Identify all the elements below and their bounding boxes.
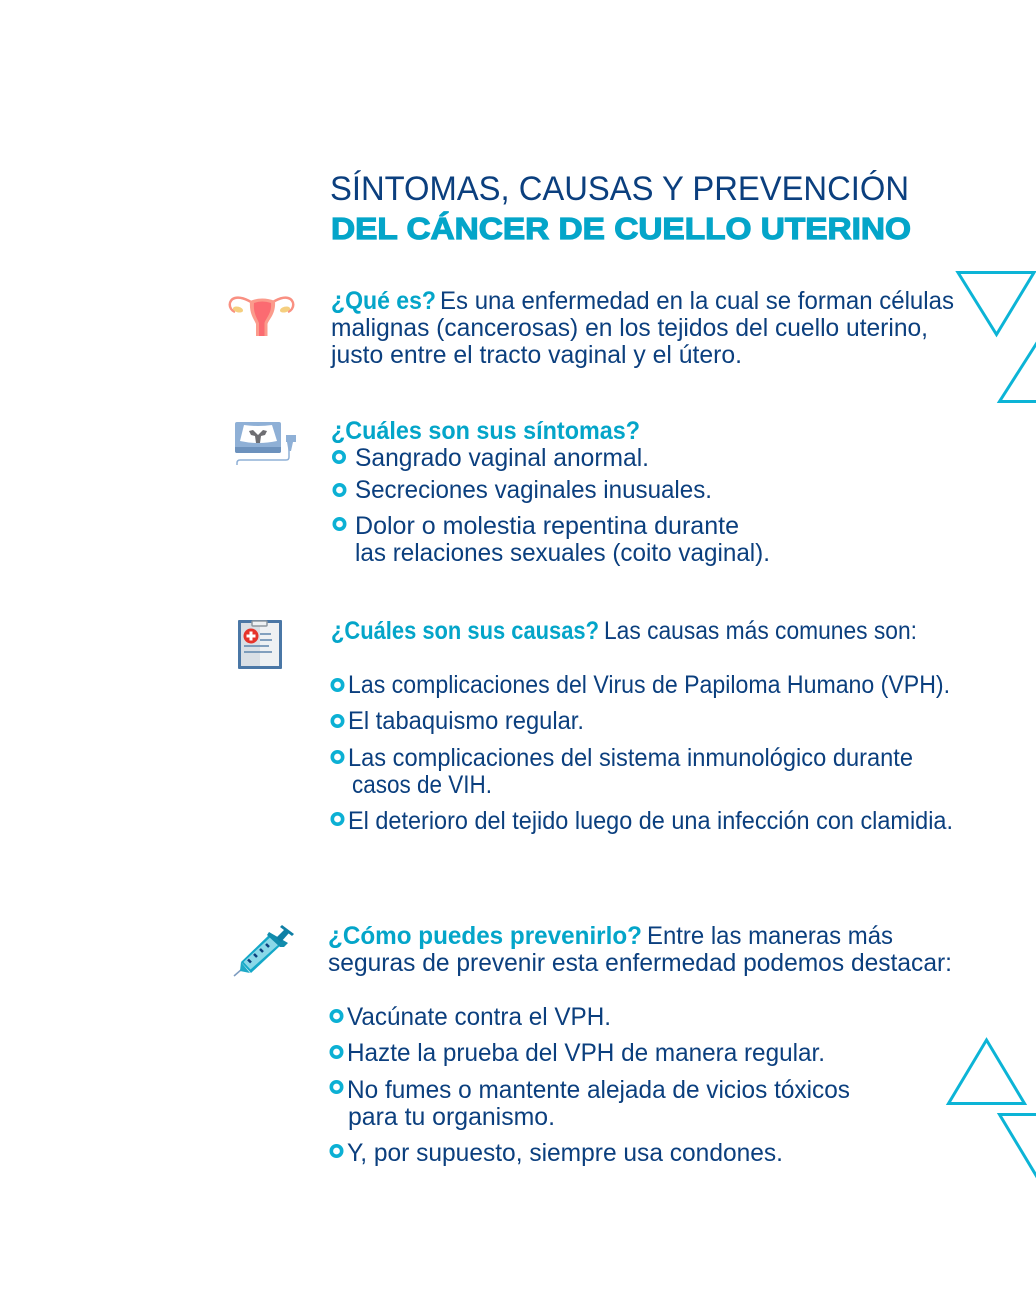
panel: symptoms: Sangrado vaginal anormal.	[355, 444, 649, 472]
icon: ultrasound	[235, 422, 296, 465]
panel: what is it: Es una enfermedad en la cual se forman células	[440, 287, 954, 315]
panel: prevention: seguras de prevenir esta enfermedad podemos destacar:	[328, 949, 952, 977]
icon: syringe	[234, 925, 294, 976]
panel: prevention: No fumes o mantente alejada de vicios tóxicos	[347, 1076, 850, 1104]
panel: symptoms	[331, 417, 770, 567]
panel: prevention: Y, por supuesto, siempre usa condones.	[347, 1139, 783, 1167]
panel: causes	[331, 617, 953, 835]
panel: prevention	[328, 922, 952, 1167]
panel: causes: Las complicaciones del sistema inmunológico durante	[348, 744, 913, 772]
panel: prevention: Entre las maneras más	[647, 922, 893, 950]
panel: what is it: justo entre el tracto vaginal y el útero.	[330, 341, 742, 369]
panel: what is it: ¿Qué es?	[331, 287, 436, 315]
icon: uterus	[230, 298, 293, 336]
panel: symptoms: Secreciones vaginales inusuales.	[355, 476, 712, 504]
panel: symptoms: las relaciones sexuales (coito vaginal).	[355, 539, 770, 567]
panel: causes: El tabaquismo regular.	[348, 707, 584, 735]
panel: causes: ¿Cuáles son sus causas?	[331, 617, 599, 645]
panel: what is it: malignas (cancerosas) en los tejidos del cuello uterino,	[331, 314, 928, 342]
decorative triangles bottom	[948, 1040, 1036, 1182]
title: DEL CÁNCER DE CUELLO UTERINO	[331, 211, 911, 246]
panel: causes: Las causas más comunes son:	[604, 617, 917, 645]
panel: causes: El deterioro del tejido luego de una infección con clamidia.	[348, 807, 953, 835]
panel: causes: casos de VIH.	[352, 771, 492, 799]
panel: prevention: Hazte la prueba del VPH de manera regular.	[347, 1039, 825, 1067]
title: SÍNTOMAS, CAUSAS Y PREVENCIÓN	[330, 170, 909, 208]
panel: causes: Las complicaciones del Virus de Papiloma Humano (VPH).	[348, 671, 950, 699]
panel: symptoms: Dolor o molestia repentina durante	[355, 512, 739, 540]
decorative triangles top	[958, 272, 1036, 402]
icon: clipboard	[238, 620, 282, 669]
panel: prevention: ¿Cómo puedes prevenirlo?	[328, 922, 642, 950]
panel: prevention: para tu organismo.	[348, 1103, 555, 1131]
panel: symptoms: ¿Cuáles son sus síntomas?	[331, 417, 640, 445]
panel: what is it	[330, 287, 954, 369]
panel: prevention: Vacúnate contra el VPH.	[347, 1003, 611, 1031]
title	[330, 170, 911, 246]
